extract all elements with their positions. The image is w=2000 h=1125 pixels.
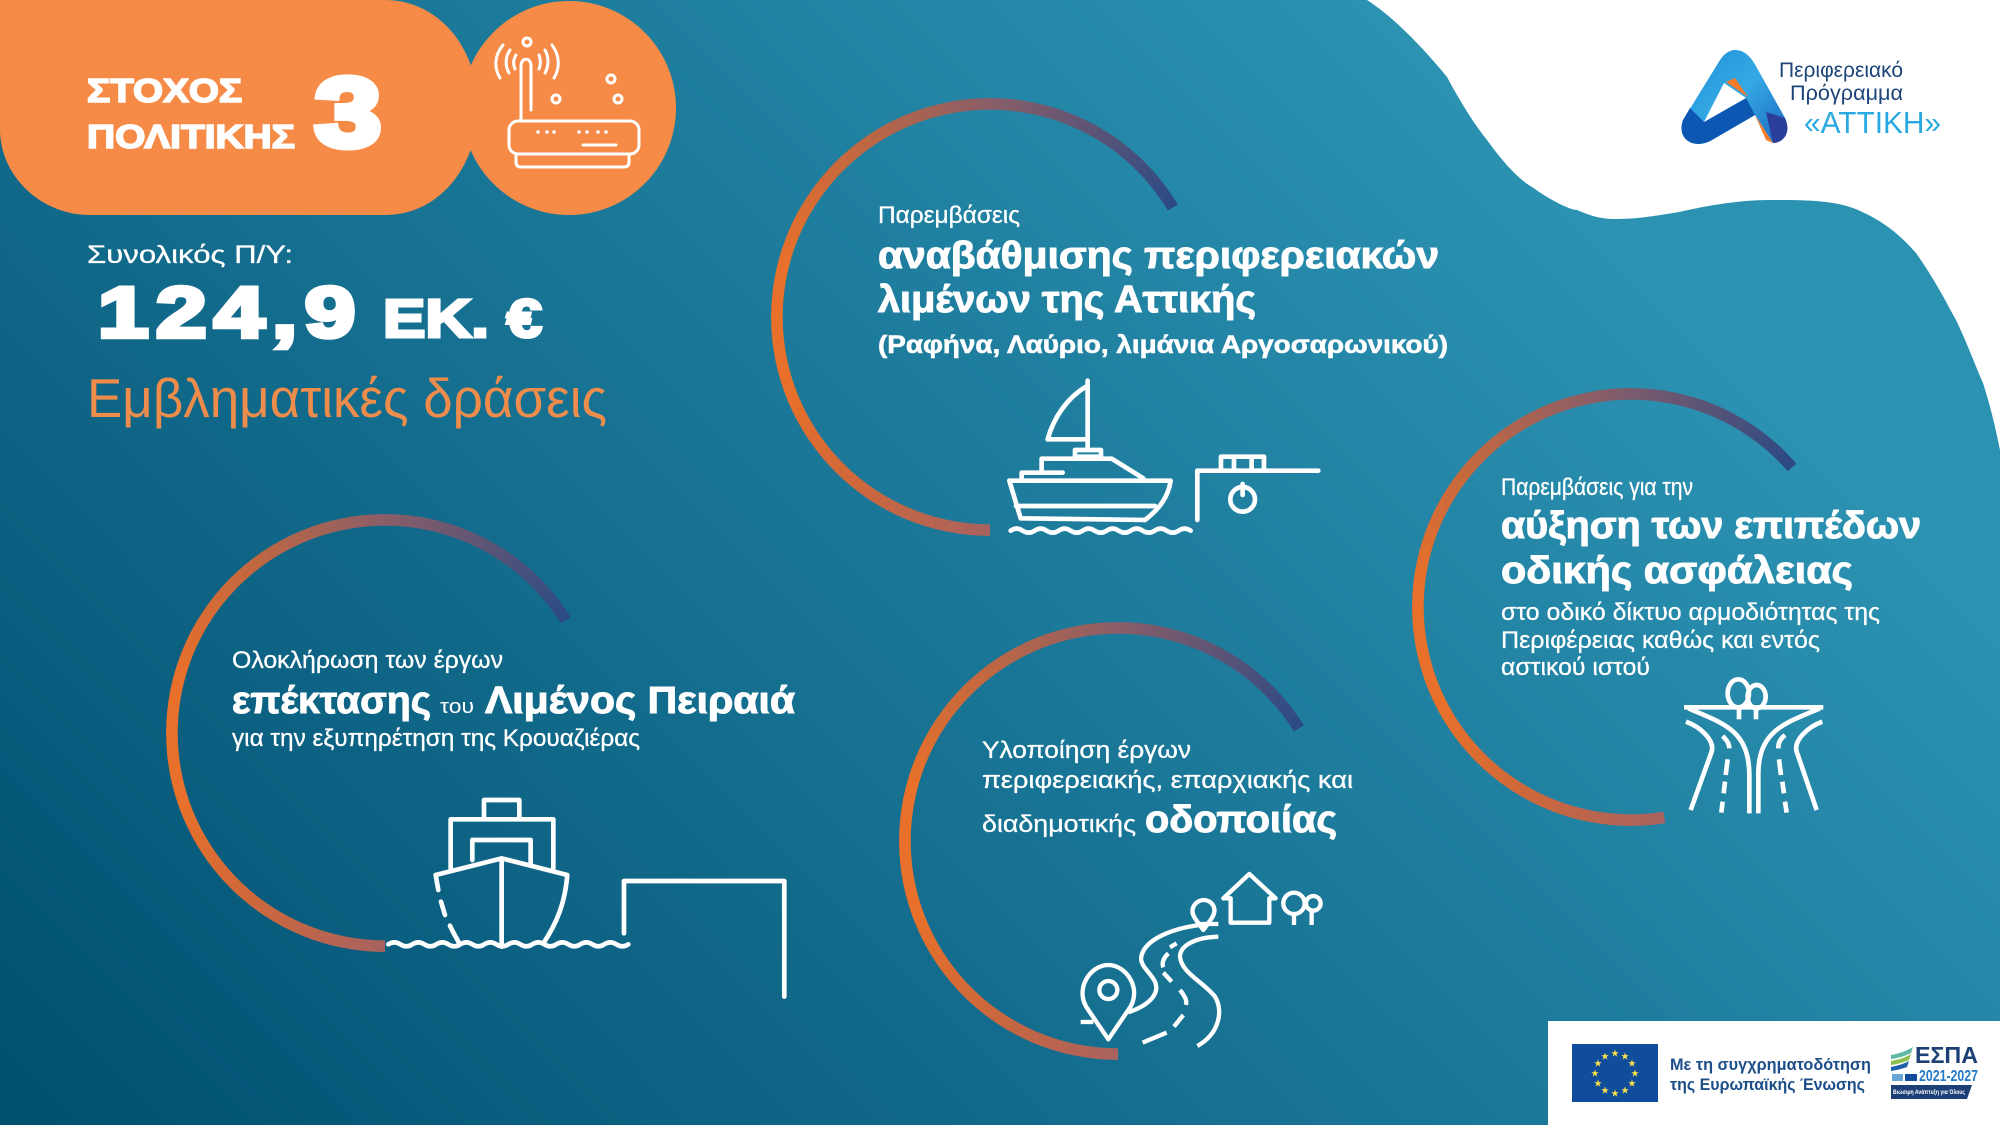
EU flag: ★ [1601,1086,1609,1095]
text: αύξηση των επιπέδων [1501,505,1921,547]
text: (Ραφήνα, Λαύριο, λιμάνια Αργοσαρωνικού) [878,331,1448,359]
icon: winding road [1081,874,1321,1046]
text: Περιφέρειας καθώς και εντός [1501,627,1820,654]
arc [899,622,1337,1060]
number 3: 3 [315,58,381,167]
co-funding text [1670,1055,1871,1094]
logo text: «ΑΤΤΙΚΗ» [1804,105,1941,140]
orange pill [0,0,478,215]
EU flag: ★ [1594,1079,1602,1088]
EU flag: ★ [1628,1079,1636,1088]
ESPA logo [1891,1042,1978,1099]
budget value: 124,9 [98,273,355,353]
co-funding text: της Ευρωπαϊκής Ένωσης [1670,1075,1865,1094]
text: οδικής ασφάλειας [1501,550,1853,592]
panel: road works [899,622,1353,1060]
ESPA logo: ΕΣΠΑ [1915,1042,1978,1068]
arc [1412,388,1796,826]
EU flag: ★ [1611,1089,1619,1098]
panel: regional ports [771,98,1448,536]
text [1501,474,1921,681]
text: για την εξυπηρέτηση της Κρουαζιέρας [232,725,640,752]
text: διαδημοτικής [982,811,1136,838]
logo text [1779,59,1941,140]
heading: objective: ΠΟΛΙΤΙΚΗΣ [87,118,295,155]
heading: objective: ΣΤΟΧΟΣ [87,72,242,109]
EU flag: ★ [1591,1069,1599,1078]
budget value [98,273,542,353]
co-funding text: Με τη συγχρηματοδότηση [1670,1055,1871,1074]
text: αναβάθμισης περιφερειακών [878,235,1439,277]
logo text: Πρόγραμμα [1790,82,1903,105]
text: οδοποιίας [1145,799,1337,841]
EU flag: ★ [1621,1086,1629,1095]
EU flag [1572,1044,1658,1102]
subheading: flagship actions: Εμβληματικές δράσεις [87,367,607,429]
text [982,737,1353,841]
text: επέκτασης [232,680,431,722]
icon: cruise ship at dock [388,800,784,997]
text: Λιμένος Πειραιά [485,680,795,722]
header: policy objective 3 [0,0,676,215]
logo: Attica programme [1682,50,1941,144]
ESPA logo: 2021-2027 [1919,1068,1978,1085]
text: Παρεμβάσεις [878,202,1020,229]
icon: sailboat at dock [1009,381,1318,533]
panel: Piraeus port [166,514,796,999]
text: Παρεμβάσεις για την [1501,474,1693,501]
icon: router [496,38,639,167]
EU flag: ★ [1611,1049,1619,1058]
panel: road safety [1412,388,1921,826]
budget block [87,241,607,429]
arc [166,514,604,952]
EU flag: ★ [1628,1059,1636,1068]
heading: objective [87,72,295,155]
text: λιμένων της Αττικής [878,279,1256,321]
logo mark [1682,50,1787,144]
EU flag: ★ [1621,1052,1629,1061]
text: αστικού ιστού [1501,654,1650,681]
text [232,647,795,752]
text: στο οδικό δίκτυο αρμοδιότητας της [1501,599,1880,626]
arc [771,98,1209,536]
text: Ολοκλήρωση των έργων [232,647,503,674]
budget value: ΕΚ. € [383,289,542,349]
EU flag: ★ [1601,1052,1609,1061]
text: Υλοποίηση έργων [982,737,1191,764]
text: περιφερειακής, επαρχιακής και [982,767,1353,794]
ESPA logo: Βιώσιμη Ανάπτυξη για Όλους [1893,1088,1965,1096]
icon: forked road [1684,679,1823,813]
logo text: Περιφερειακό [1779,59,1903,82]
EU flag: ★ [1631,1069,1639,1078]
footer: co-funding logos [1548,1021,2000,1125]
orange circle [462,1,676,215]
budget label: Συνολικός Π/Υ: [87,241,293,269]
text [878,202,1448,359]
text: του [440,696,474,718]
EU flag: ★ [1594,1059,1602,1068]
